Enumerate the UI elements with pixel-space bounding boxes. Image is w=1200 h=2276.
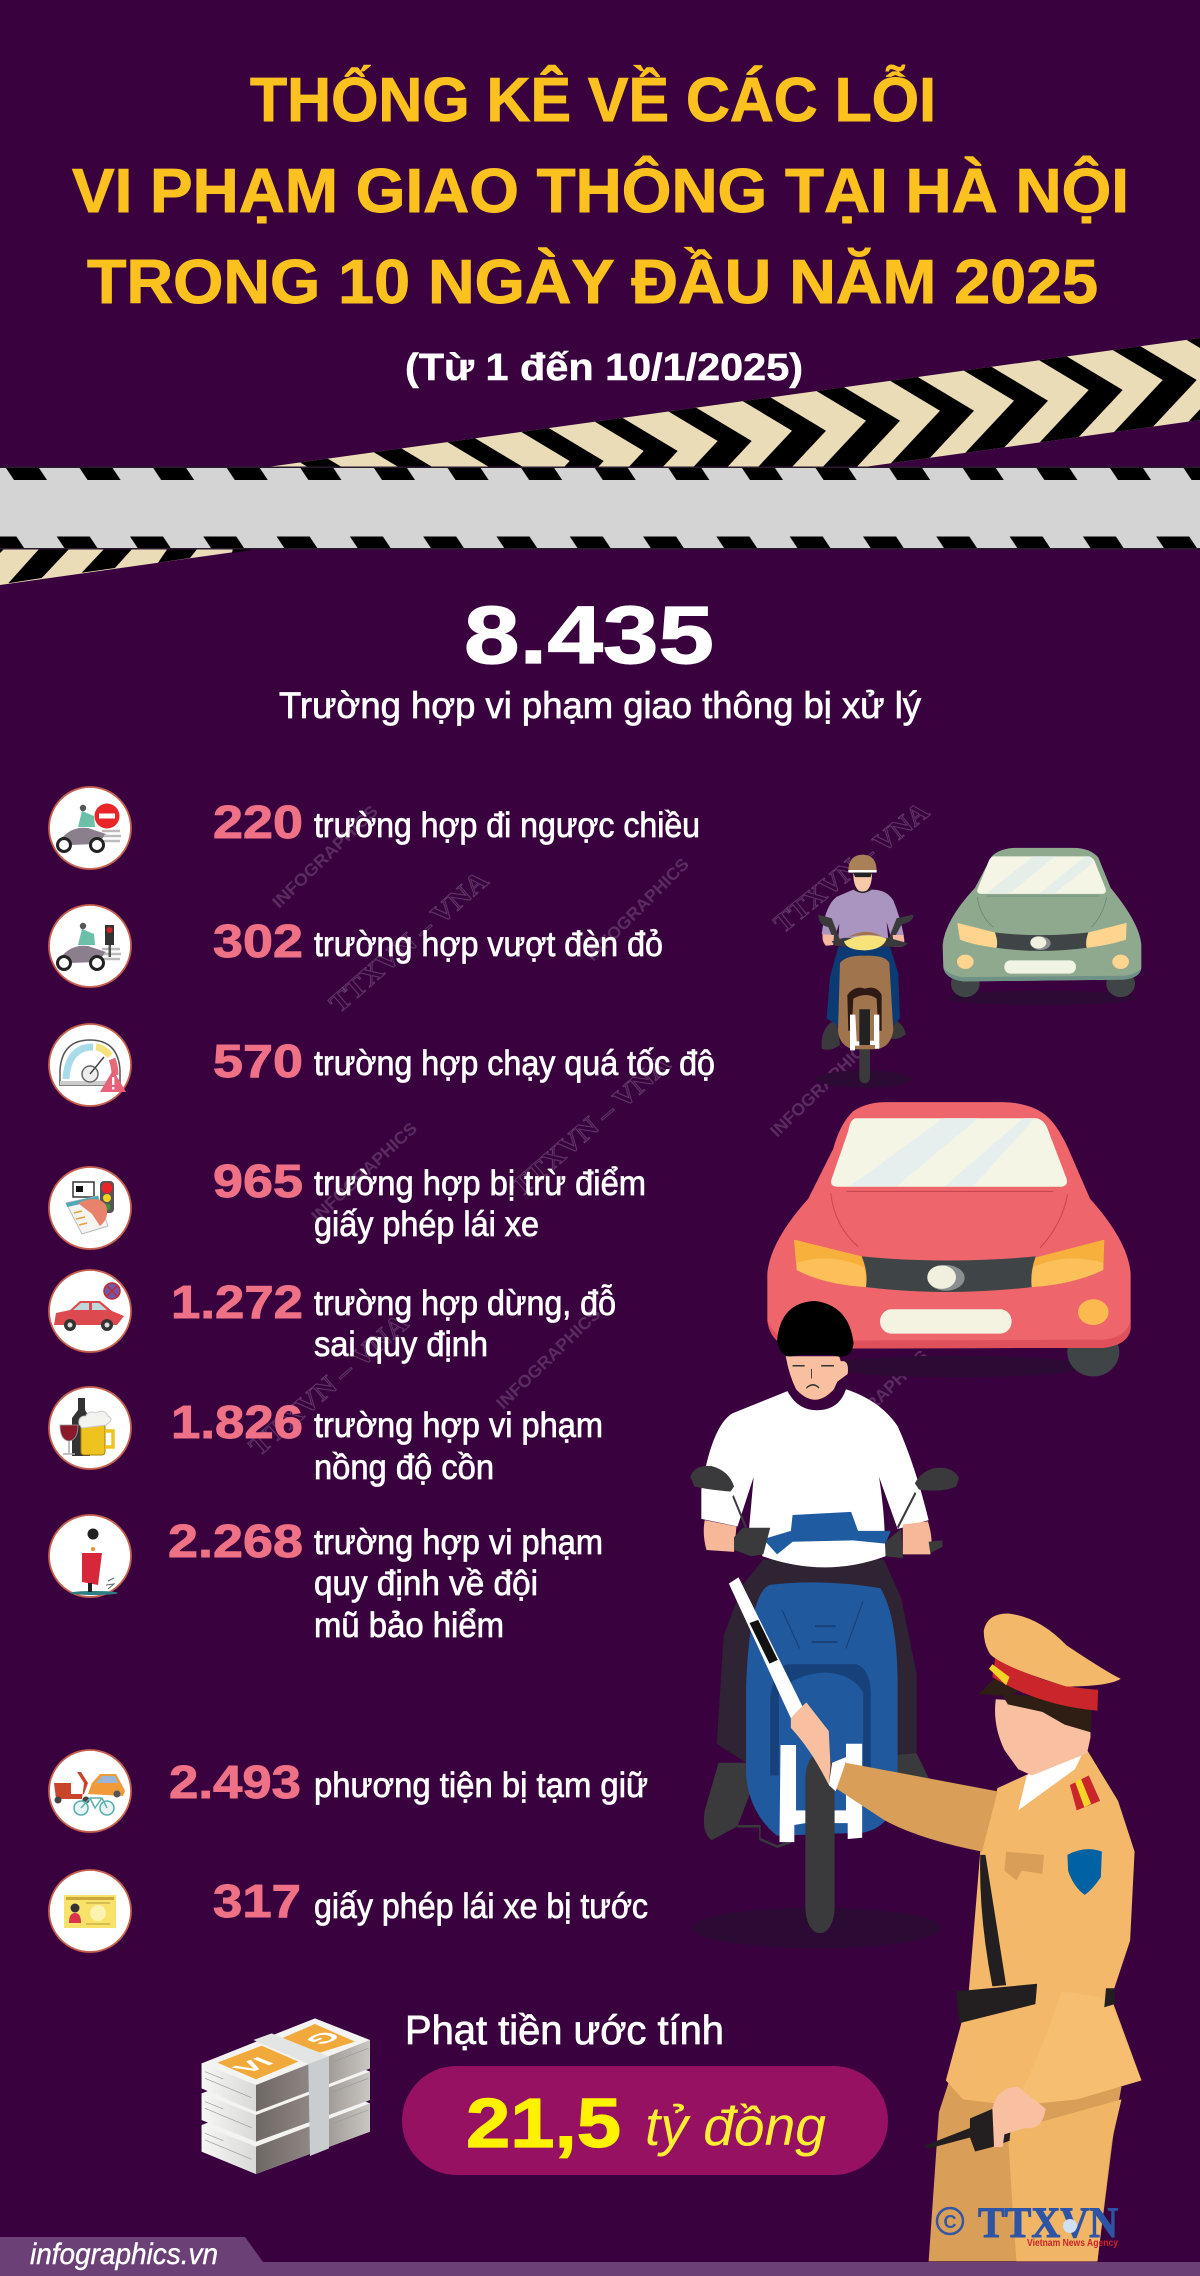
description: trường hợp vi phạm xyxy=(314,1523,603,1562)
description: trường hợp đi ngược chiều xyxy=(314,806,700,845)
description: sai quy định xyxy=(314,1325,488,1364)
icon: motorbike and red light xyxy=(49,905,131,987)
description: trường hợp bị trừ điểm xyxy=(314,1164,646,1203)
description xyxy=(314,1406,603,1487)
description: trường hợp vi phạm xyxy=(314,1406,603,1445)
description: giấy phép lái xe bị tước xyxy=(314,1887,648,1926)
barrier tape: chevron strip xyxy=(271,338,1200,466)
number: 220 xyxy=(213,796,303,848)
icon: wine and beer xyxy=(49,1387,131,1469)
barrier tape: left end strip xyxy=(0,548,263,585)
small motorbike rider xyxy=(817,855,913,1087)
icon: scooter rider without helmet xyxy=(49,1515,131,1597)
watermarks: INFOGRAPHICS xyxy=(269,802,382,912)
traffic police officer xyxy=(791,1613,1141,2261)
icon: red car and no-parking sign xyxy=(49,1270,131,1352)
green car xyxy=(943,848,1141,1005)
row: red light running xyxy=(49,905,663,987)
description: phương tiện bị tạm giữ xyxy=(314,1766,648,1805)
big motorbike rider xyxy=(690,1301,959,1948)
watermarks: INFOGRAPHICS xyxy=(582,855,693,965)
icon: speedometer xyxy=(49,1024,131,1106)
footer bar: infographics.vn xyxy=(30,2238,218,2271)
number: 1.272 xyxy=(171,1276,303,1328)
number: 2.493 xyxy=(169,1756,301,1808)
fine label: Phạt tiền ước tính xyxy=(405,2007,724,2053)
number: 965 xyxy=(213,1155,303,1207)
icon: motorbike and no-entry sign xyxy=(49,787,131,869)
road band xyxy=(0,466,1200,550)
title: VI PHẠM GIAO THÔNG TẠI HÀ NỘI xyxy=(72,157,1129,226)
description xyxy=(314,1284,616,1364)
description: trường hợp dừng, đỗ xyxy=(314,1284,616,1323)
row: alcohol xyxy=(49,1387,603,1487)
fine amount pill xyxy=(402,2066,888,2175)
title: THỐNG KÊ VỀ CÁC LỖI xyxy=(250,66,936,135)
description: quy định về đội xyxy=(314,1564,538,1603)
number: 570 xyxy=(213,1035,303,1087)
title: TRONG 10 NGÀY ĐẦU NĂM 2025 xyxy=(87,248,1098,317)
description xyxy=(314,1164,646,1244)
row: wrong-way driving xyxy=(49,787,700,869)
logo: copyright TTXVN: Vietnam News Agency xyxy=(1027,2238,1118,2249)
row: illegal stopping and parking xyxy=(49,1270,616,1364)
watermarks xyxy=(243,795,935,1462)
description xyxy=(314,1523,603,1645)
fine amount pill: 21,5 xyxy=(466,2084,621,2162)
logo: copyright TTXVN: TTXVN xyxy=(978,2200,1118,2247)
fine amount pill: tỷ đồng xyxy=(645,2095,826,2157)
description: nồng độ cồn xyxy=(314,1448,494,1487)
icon: stack of banknotes: VI xyxy=(227,2055,281,2076)
baton xyxy=(729,1577,812,1725)
row: helmet violations xyxy=(49,1515,603,1645)
description: giấy phép lái xe xyxy=(314,1205,539,1244)
icon: driving licence xyxy=(49,1870,131,1952)
icon: stack of banknotes: G xyxy=(298,2028,347,2048)
number: 302 xyxy=(213,915,303,967)
headline caption: Trường hợp vi phạm giao thông bị xử lý xyxy=(279,685,921,726)
red car xyxy=(767,1102,1131,1377)
description: trường hợp vượt đèn đỏ xyxy=(314,925,663,964)
footer bar xyxy=(0,2237,1200,2276)
subtitle: date range: (Từ 1 đến 10/1/2025) xyxy=(405,347,803,389)
watermarks: TTXVN – VNA xyxy=(243,1307,414,1462)
icon: camera, traffic light and form xyxy=(49,1167,131,1249)
watermarks: INFOGRAPHICS xyxy=(493,1304,604,1413)
watermarks: INFOGRAPHICS xyxy=(767,1033,877,1141)
icon: scooter, car and bicycle xyxy=(49,1750,131,1832)
number: 1.826 xyxy=(171,1396,303,1448)
logo: copyright TTXVN: C xyxy=(944,2212,956,2232)
watermarks: INFOGRAPHICS xyxy=(308,1119,421,1226)
description: mũ bảo hiểm xyxy=(314,1606,504,1645)
headline number: 8.435 xyxy=(464,590,714,681)
row: licence points deducted xyxy=(49,1155,646,1249)
watermarks: TTXVN – VNA xyxy=(505,1048,676,1203)
number: 2.268 xyxy=(168,1515,303,1567)
title xyxy=(72,66,1129,317)
row: vehicles impounded xyxy=(49,1750,648,1832)
row: speeding xyxy=(49,1024,715,1106)
description: trường hợp chạy quá tốc độ xyxy=(314,1044,715,1083)
row: licences revoked xyxy=(49,1870,648,1952)
watermarks: TTXVN – VNA xyxy=(323,864,494,1019)
watermarks: TTXVN – VNA xyxy=(768,795,935,939)
watermarks: INFOGRAPHICS xyxy=(822,1346,932,1454)
number: 317 xyxy=(213,1875,301,1927)
icon: stack of banknotes xyxy=(202,2018,370,2174)
